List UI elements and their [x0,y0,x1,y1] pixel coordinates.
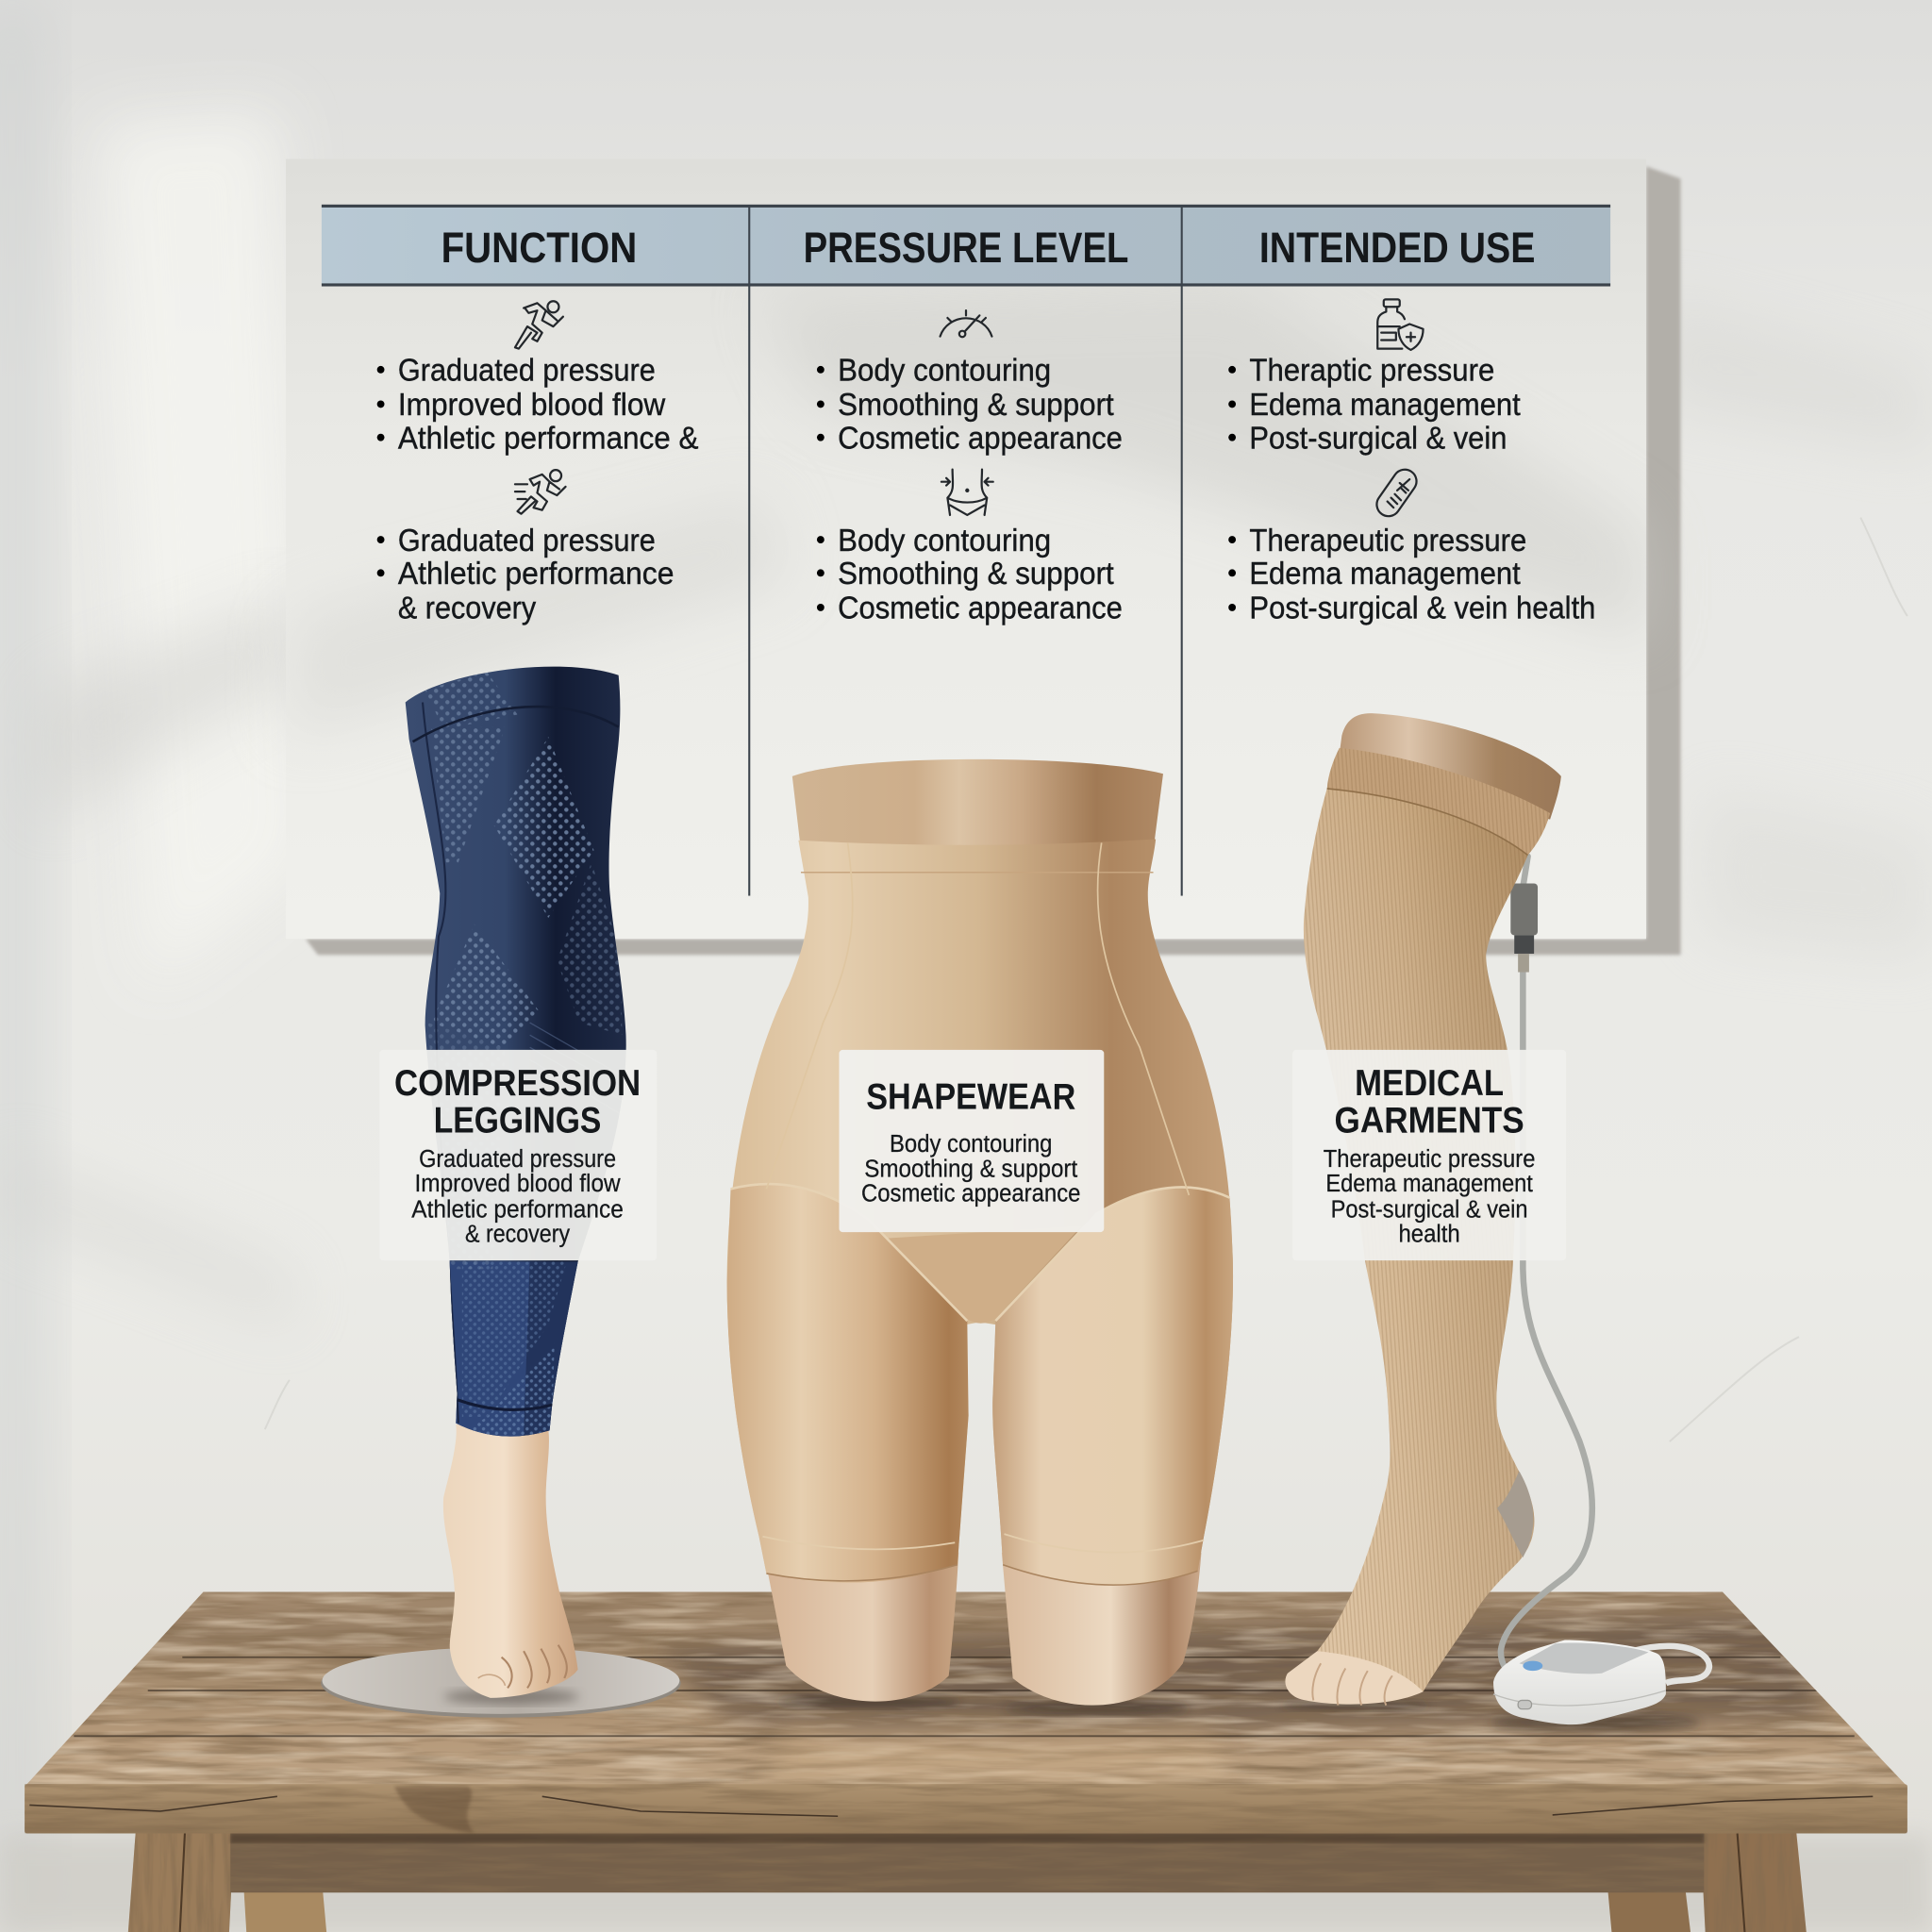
bullets: function top: Improved blood flow [398,388,666,423]
label: compression leggings: Athletic performance [411,1196,624,1223]
table front edge [25,1784,1907,1834]
icon: runner [515,301,563,349]
bullets: function bottom: Graduated pressure [398,524,656,558]
thigh panels [727,1184,1233,1585]
bullets: function bottom [377,524,674,626]
label: shapewear: Body contouring [890,1131,1052,1158]
bullets: function bottom: & recovery [398,591,536,626]
label: medical garments: health [1398,1222,1460,1248]
shapewear group [727,759,1233,1706]
table top surface [25,1592,1907,1787]
bullets: use bottom: Edema management [1249,557,1521,591]
shapewear shorts body [727,839,1233,1585]
label: medical garments: Post-surgical & vein [1331,1196,1528,1223]
label: compression leggings: Graduated pressure [419,1146,616,1173]
bullets: function bottom: Athletic performance [398,557,674,591]
air tube [1501,857,1592,1678]
heel patch [1497,1472,1533,1557]
label: medical garments [1292,1050,1566,1260]
heading: function: FUNCTION [441,224,637,272]
table apron rail [230,1834,1704,1892]
bullets: use top: Theraptic pressure [1249,354,1494,389]
compression leggings group [321,667,681,1718]
wall board shadow [306,166,1681,955]
heading: pressure level: PRESSURE LEVEL [804,224,1128,272]
label: shapewear: Smoothing & support [864,1156,1077,1182]
icon: sprinter [515,470,566,514]
leg cap [1340,713,1561,820]
bullets: pressure top: Smoothing & support [838,388,1114,423]
label: shapewear [839,1050,1104,1232]
metal base disc [321,1647,681,1718]
bullets: use bottom [1228,524,1595,626]
medical garment group [1285,713,1709,1724]
bullets: use top: Edema management [1249,388,1521,423]
tube connector [1510,883,1538,973]
icon: waist [941,470,993,515]
label: medical garments: Edema management [1325,1171,1533,1197]
stocking cuff [1327,748,1550,855]
table front legs [124,1834,1811,1932]
bullets: function top: Graduated pressure [398,354,656,389]
label: medical garments: MEDICAL [1355,1063,1504,1104]
bullets: pressure bottom [817,524,1123,626]
table back legs [244,1891,1690,1932]
heading: intended use: INTENDED USE [1259,224,1535,272]
comparison board [286,158,1646,939]
legging sleeve [406,667,626,1441]
bullets: pressure top: Cosmetic appearance [838,421,1123,456]
label: medical garments: GARMENTS [1335,1100,1524,1141]
table header band [322,205,1610,287]
bullets: pressure bottom: Cosmetic appearance [838,591,1123,626]
icon: bottle and shield [1377,299,1424,350]
compression stocking [1304,747,1550,1692]
bullets: pressure top [817,354,1123,456]
label: compression leggings [379,1050,657,1260]
bullets: use bottom: Therapeutic pressure [1249,524,1526,558]
bullets: pressure top: Body contouring [838,354,1051,389]
crotch gusset [887,1226,1082,1324]
bullets: use top: Post-surgical & vein [1249,421,1507,456]
icon: bandage [1373,465,1421,521]
blood pressure device [1493,1640,1709,1724]
mannequin foot [443,1424,578,1698]
bullets: use bottom: Post-surgical & vein health [1249,591,1595,626]
label: shapewear: SHAPEWEAR [866,1077,1075,1118]
bullets: use top [1228,354,1521,456]
mannequin waist [792,759,1163,850]
label: shapewear: Cosmetic appearance [861,1180,1080,1207]
wooden table [25,1592,1907,1932]
mannequin thigh ends [764,1553,1201,1706]
label: medical garments: Therapeutic pressure [1324,1146,1535,1173]
bullets: function top: Athletic performance & [398,421,699,456]
icon: gauge [941,310,991,337]
bullets: pressure bottom: Smoothing & support [838,557,1114,591]
stocking toes [1285,1651,1424,1706]
label: compression leggings: & recovery [465,1222,570,1248]
label: compression leggings: Improved blood flow [415,1171,621,1197]
label: compression leggings: LEGGINGS [434,1100,601,1141]
label: compression leggings: COMPRESSION [394,1063,641,1104]
bullets: function top [377,354,699,456]
bullets: pressure bottom: Body contouring [838,524,1051,558]
